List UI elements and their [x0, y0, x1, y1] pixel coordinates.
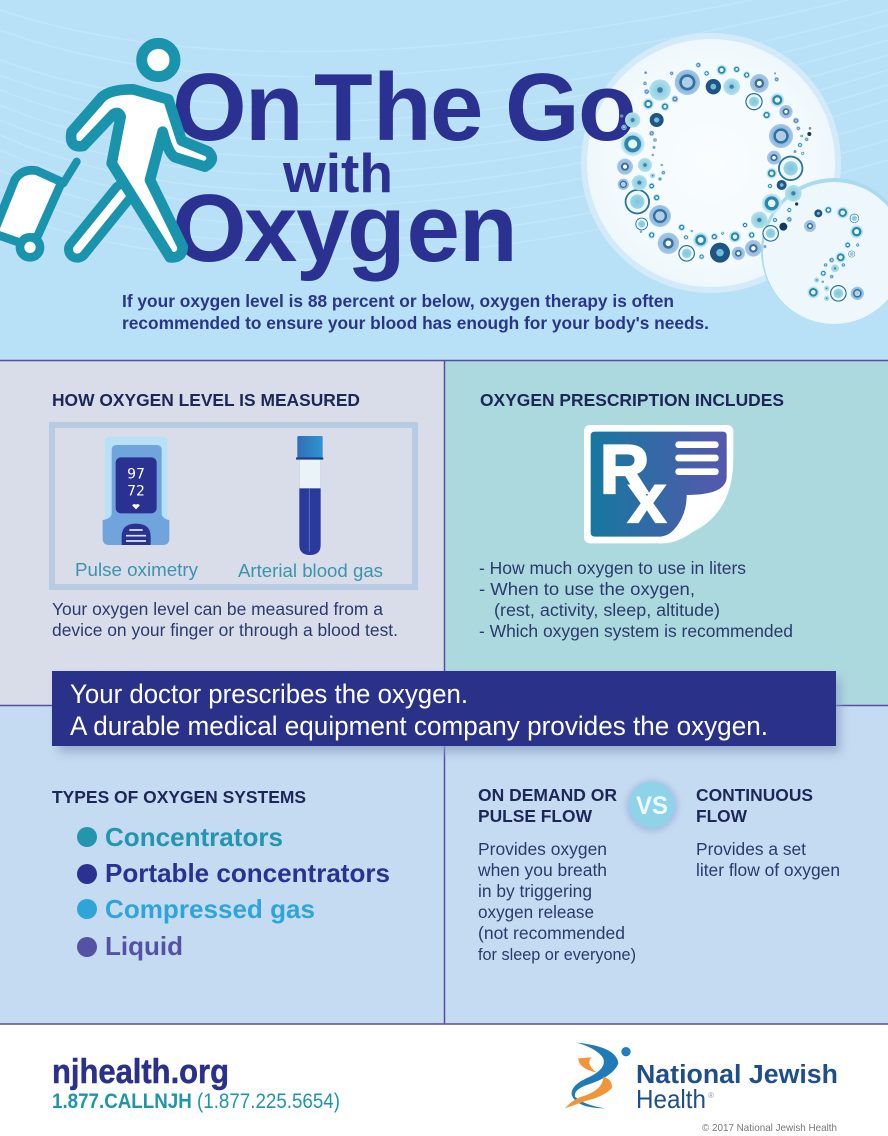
prescription list: - How much oxygen to use in liters [479, 558, 746, 578]
heading: continuous: FLOW [696, 806, 748, 826]
title [172, 54, 637, 282]
prescription list: - Which oxygen system is recommended [479, 621, 793, 641]
icon: pulse oximeter: 72 [127, 483, 145, 499]
label: Arterial blood gas [238, 560, 383, 581]
item: portable concentrators: Portable concentrators [105, 858, 390, 888]
heading: HOW OXYGEN LEVEL IS MEASURED [52, 390, 360, 410]
intro text: If your oxygen level is 88 percent or below, oxygen therapy is often [122, 291, 674, 311]
measurement frame [52, 425, 415, 587]
icon: Rx sheet: x [627, 459, 667, 538]
label: Pulse oximetry [75, 559, 199, 580]
heading: continuous [696, 785, 813, 826]
panel: how oxygen level is measured [0, 361, 444, 705]
panel: types of oxygen systems [0, 706, 444, 1024]
heading: continuous: CONTINUOUS [696, 785, 813, 805]
logo: National Jewish Health [565, 1043, 838, 1114]
logo text: National Jewish [636, 1061, 838, 1089]
callout banner: Your doctor prescribes the oxygen. [70, 679, 468, 709]
heading: OXYGEN PRESCRIPTION INCLUDES [480, 390, 784, 410]
icon: vs badge: VS [636, 792, 668, 820]
logo mark [565, 1043, 631, 1108]
website: njhealth.org [52, 1053, 229, 1091]
header background [0, 0, 888, 361]
description: Your oxygen level can be measured from a [52, 599, 383, 619]
title: On The Go [172, 54, 637, 161]
text: on demand description: in by triggering [478, 881, 592, 901]
icon: pulse oximeter [103, 437, 169, 545]
intro text: recommended to ensure your blood has enough for your body's needs. [122, 313, 709, 333]
heading: on demand: PULSE FLOW [478, 806, 593, 826]
item: liquid: Liquid [105, 931, 183, 961]
icon: head [142, 43, 175, 77]
item: concentrators: Concentrators [105, 822, 283, 852]
copyright: © 2017 National Jewish Health [702, 1122, 837, 1134]
description: device on your finger or through a blood test. [52, 620, 398, 640]
title: Oxygen [172, 175, 518, 282]
logo: National Jewish Health: Health [636, 1084, 706, 1114]
icon: Rx sheet: R [600, 432, 649, 508]
text: on demand description: oxygen release [478, 902, 594, 922]
text: on demand description: Provides oxygen [478, 839, 607, 859]
text: on demand description: for sleep or everyone) [478, 946, 636, 964]
icon: blood tube [296, 436, 323, 555]
logo: National Jewish Health: ® [708, 1091, 714, 1100]
heading: on demand [478, 785, 618, 826]
callout banner [52, 671, 840, 752]
prescription list: - When to use the oxygen, [479, 579, 695, 599]
panel: flow comparison [445, 706, 888, 1024]
text: on demand description: when you breath [477, 860, 607, 880]
icon: pulse oximeter: 97 [127, 466, 145, 482]
icon: vs badge [626, 780, 678, 832]
icon: back leg [77, 193, 123, 249]
text: on demand description: (not recommended [478, 923, 625, 943]
description [52, 599, 398, 640]
icon: body [71, 89, 212, 257]
item: compressed gas: Compressed gas [105, 894, 315, 924]
phone: 1.877.CALLNJH (1.877.225.5654) [52, 1090, 340, 1113]
icon: traveller with suitcase [0, 43, 212, 257]
large O circle [581, 33, 841, 293]
panel: oxygen prescription includes [445, 361, 888, 705]
callout banner: A durable medical equipment company provides the oxygen. [70, 711, 768, 741]
prescription list [479, 558, 793, 641]
text: continuous description: Provides a set [696, 839, 806, 859]
heading: on demand: ON DEMAND OR [478, 785, 618, 805]
text: continuous description: liter flow of oxygen [696, 860, 840, 880]
small subscript circle [761, 178, 888, 324]
text: continuous description [696, 839, 840, 880]
icon: Rx sheet [584, 425, 733, 543]
heading: TYPES OF OXYGEN SYSTEMS [52, 787, 306, 807]
icon: suitcase [0, 162, 77, 257]
title: with [282, 142, 393, 204]
O2 bubble illustration [617, 62, 864, 302]
text: on demand description [477, 839, 636, 964]
prescription list: (rest, activity, sleep, altitude) [494, 600, 720, 620]
footer [0, 1025, 888, 1136]
intro text [122, 291, 709, 333]
